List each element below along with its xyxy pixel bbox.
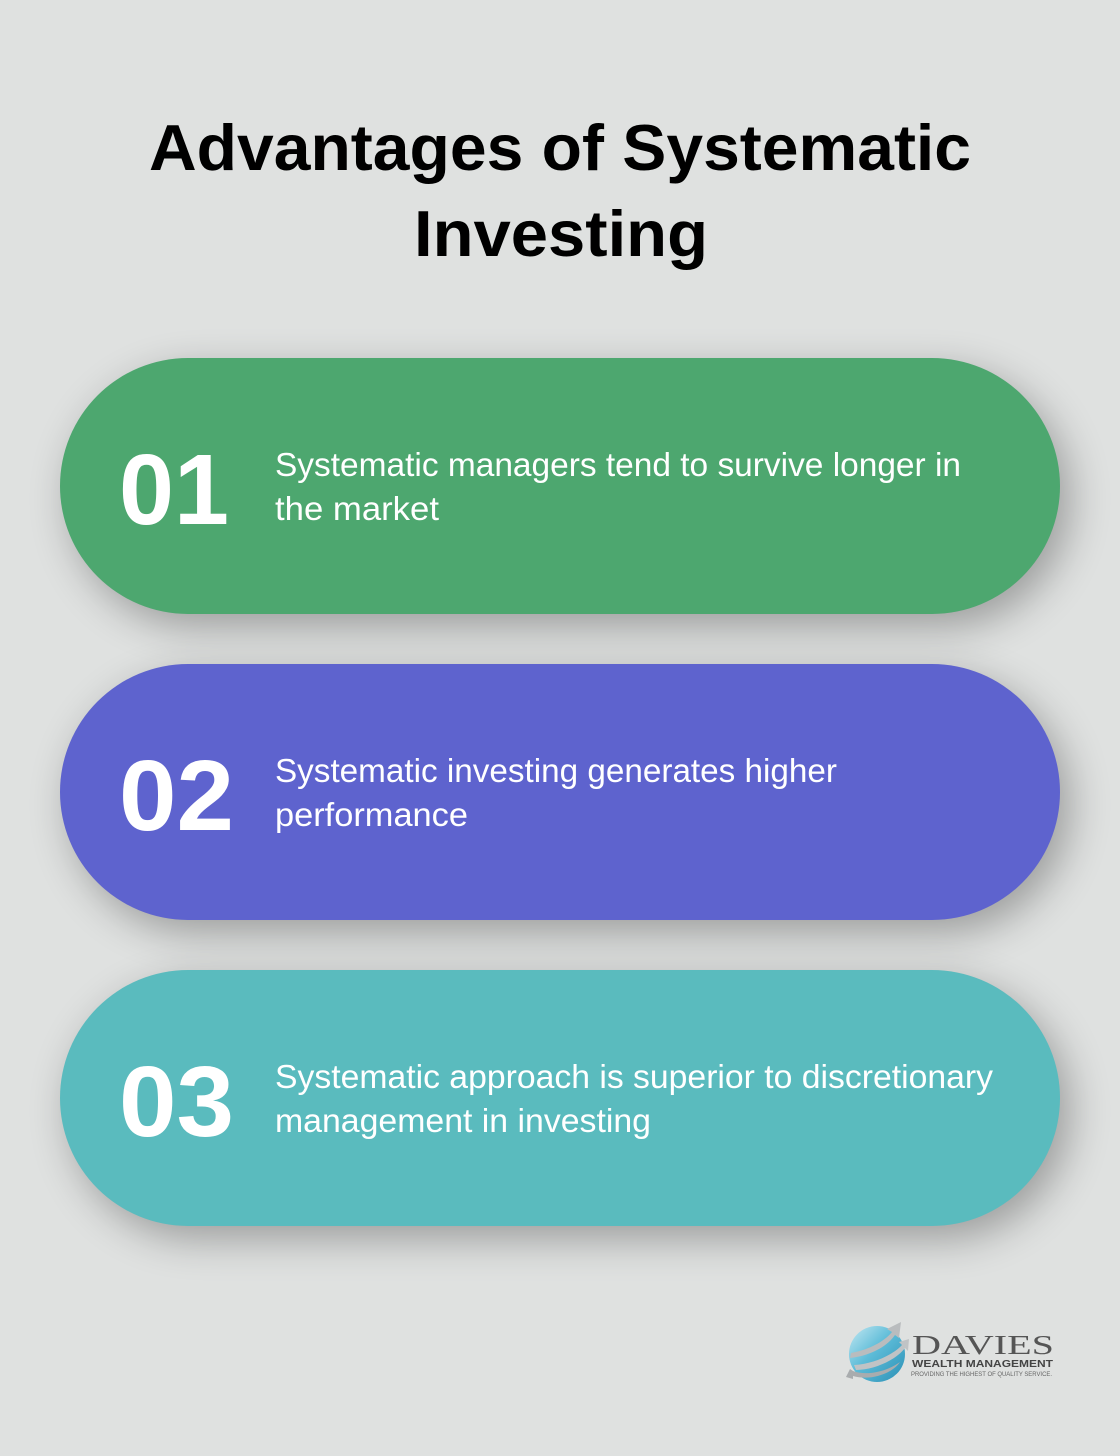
card 01 number: 01: [119, 434, 229, 546]
title: Advantages of Systematic: [149, 111, 971, 184]
panel: card 01 background: [60, 358, 1060, 614]
card 03 text: [275, 1058, 994, 1139]
card 02 text: [275, 752, 837, 833]
card 01 text: [275, 446, 961, 527]
panel: card 02 background: [60, 664, 1060, 920]
panel: card 03 background: [60, 970, 1060, 1226]
title: [149, 111, 971, 270]
title: Investing: [414, 197, 708, 270]
card 02 number: 02: [119, 740, 234, 852]
card 03 text: management in investing: [275, 1102, 651, 1139]
card 03 number: 03: [119, 1046, 234, 1158]
logo wordmark: DAVIES: [912, 1330, 1054, 1360]
card 01 text: Systematic managers tend to survive longer in: [275, 446, 961, 483]
card 02 text: Systematic investing generates higher: [275, 752, 837, 789]
logo tagline: PROVIDING THE HIGHEST OF QUALITY SERVICE.: [911, 1371, 1052, 1378]
card 03 text: Systematic approach is superior to discretionary: [275, 1058, 994, 1095]
card 02 text: performance: [275, 796, 468, 833]
logo: Davies Wealth Management: [846, 1322, 1054, 1382]
logo subtitle: WEALTH MANAGEMENT: [912, 1358, 1054, 1370]
card 01 text: the market: [275, 490, 439, 527]
icon: globe with arrows: [846, 1322, 909, 1382]
